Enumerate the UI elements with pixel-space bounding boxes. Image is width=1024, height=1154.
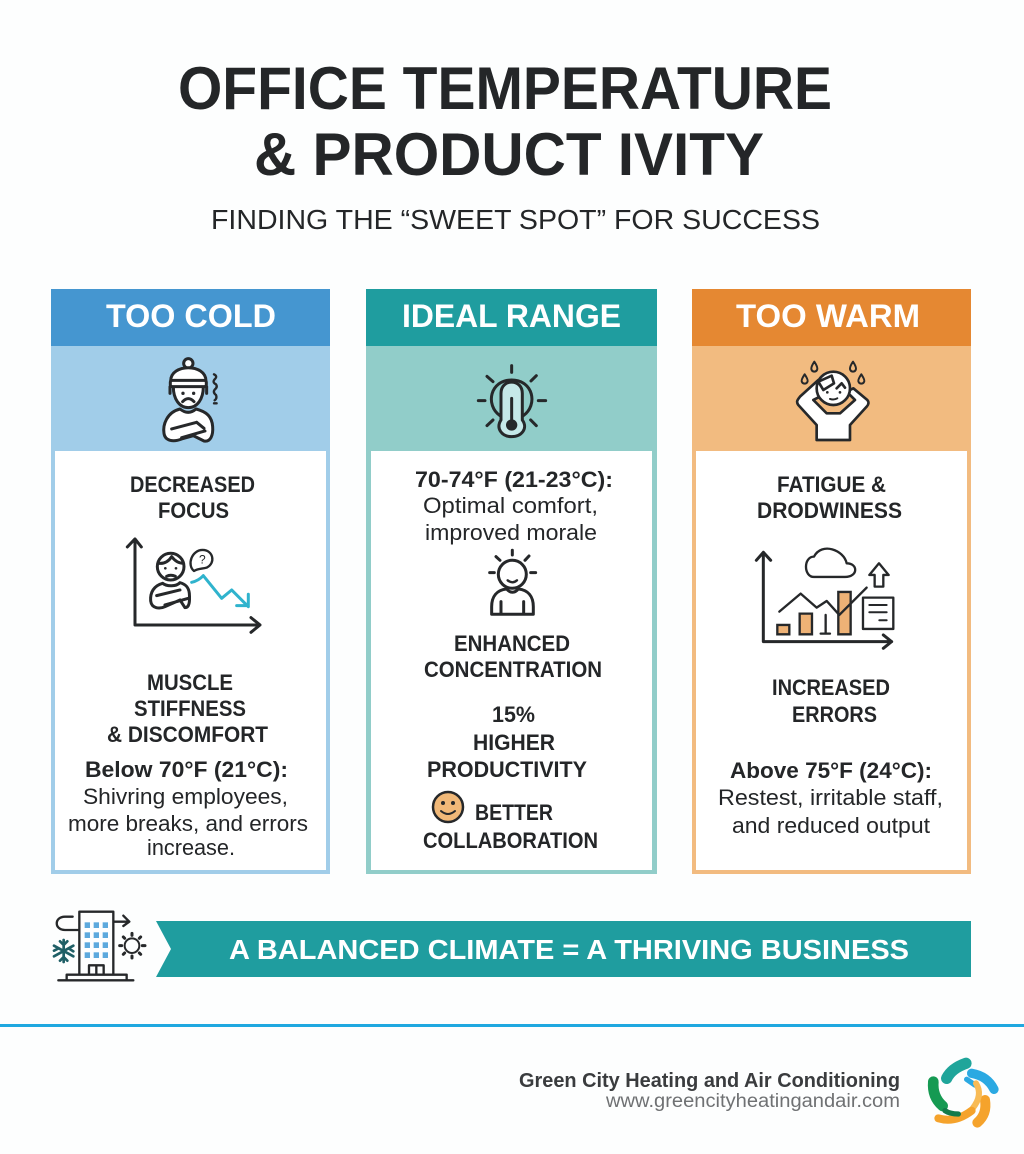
- text: decreased focus: FOCUS: [158, 498, 229, 523]
- title: [178, 55, 832, 188]
- text: below 70F: Shivring employees,: [83, 784, 288, 809]
- text: muscle stiffness: [107, 670, 269, 747]
- panel: too warm: [692, 289, 971, 874]
- icon: shivering person: [164, 359, 217, 441]
- text: below 70F: [68, 757, 308, 860]
- footer text: www.greencityheatingandair.com: [605, 1091, 900, 1112]
- text: muscle stiffness: MUSCLE: [147, 670, 233, 695]
- text: better collaboration: [423, 800, 598, 853]
- chart: rising errors: [756, 549, 893, 648]
- footer text: Green City Heating and Air Conditioning: [519, 1070, 900, 1092]
- text: above 75F: [718, 758, 943, 838]
- text: below 70F: increase.: [147, 835, 235, 860]
- text: above 75F: and reduced output: [732, 813, 930, 838]
- text: 70-74F optimal comfort: [415, 467, 613, 545]
- text: above 75F: Above 75°F (24°C):: [730, 758, 932, 783]
- text: below 70F: Below 70°F (21°C):: [85, 757, 288, 782]
- text: decreased focus: DECREASED: [130, 472, 255, 497]
- text: decreased focus: [130, 472, 255, 523]
- text: enhanced concentration: CONCENTRATION: [424, 657, 602, 682]
- text: enhanced concentration: [424, 631, 602, 682]
- text: increased errors: ERRORS: [792, 702, 877, 727]
- chart: declining focus: ?: [199, 552, 206, 566]
- text: muscle stiffness: & DISCOMFORT: [107, 722, 269, 747]
- text: 15% higher productivity: HIGHER: [473, 730, 555, 755]
- text: below 70F: more breaks, and errors: [68, 811, 308, 836]
- chart: declining focus: [127, 539, 260, 632]
- icon: thermometer: [478, 366, 546, 437]
- heading: ideal range: [366, 289, 657, 346]
- heading: too warm: TOO WARM: [736, 298, 920, 334]
- title: OFFICE TEMPERATURE: [178, 55, 832, 122]
- title: & PRODUCT IVITY: [254, 121, 764, 188]
- text: enhanced concentration: ENHANCED: [454, 631, 570, 656]
- text: 70-74F optimal comfort: improved morale: [425, 520, 597, 545]
- logo: [933, 1063, 994, 1123]
- text: better collaboration: BETTER: [475, 800, 553, 825]
- text: muscle stiffness: STIFFNESS: [134, 696, 246, 721]
- text: fatigue: FATIGUE &: [777, 472, 886, 497]
- text: 15% higher productivity: 15%: [492, 702, 535, 727]
- heading: too warm: [692, 289, 971, 346]
- heading: too cold: TOO COLD: [106, 298, 276, 334]
- icon: happy person: [490, 550, 536, 614]
- panel: too cold: [51, 289, 330, 874]
- text: increased errors: INCREASED: [772, 675, 890, 700]
- icon: smiley: [433, 792, 463, 822]
- text: 70-74F optimal comfort: 70-74°F (21-23°C):: [415, 467, 613, 492]
- icon: sweating person: [797, 362, 868, 440]
- banner: A BALANCED CLIMATE = A THRIVING BUSINESS: [229, 934, 909, 965]
- footer text: [519, 1070, 900, 1112]
- icon: building with climate: [54, 912, 145, 980]
- banner: [156, 921, 971, 977]
- text: increased errors: [772, 675, 890, 727]
- panel: ideal range: [366, 289, 657, 874]
- text: 15% higher productivity: PRODUCTIVITY: [427, 757, 587, 782]
- text: fatigue: DRODWINESS: [757, 498, 902, 523]
- heading: ideal range: IDEAL RANGE: [402, 298, 621, 334]
- heading: too cold: [51, 289, 330, 346]
- text: 70-74F optimal comfort: Optimal comfort,: [423, 493, 598, 518]
- text: fatigue: [757, 472, 902, 523]
- text: above 75F: Restest, irritable staff,: [718, 785, 943, 810]
- text: better collaboration: COLLABORATION: [423, 828, 598, 853]
- subtitle: FINDING THE “SWEET SPOT” FOR SUCCESS: [211, 204, 820, 235]
- text: 15% higher productivity: [427, 702, 587, 782]
